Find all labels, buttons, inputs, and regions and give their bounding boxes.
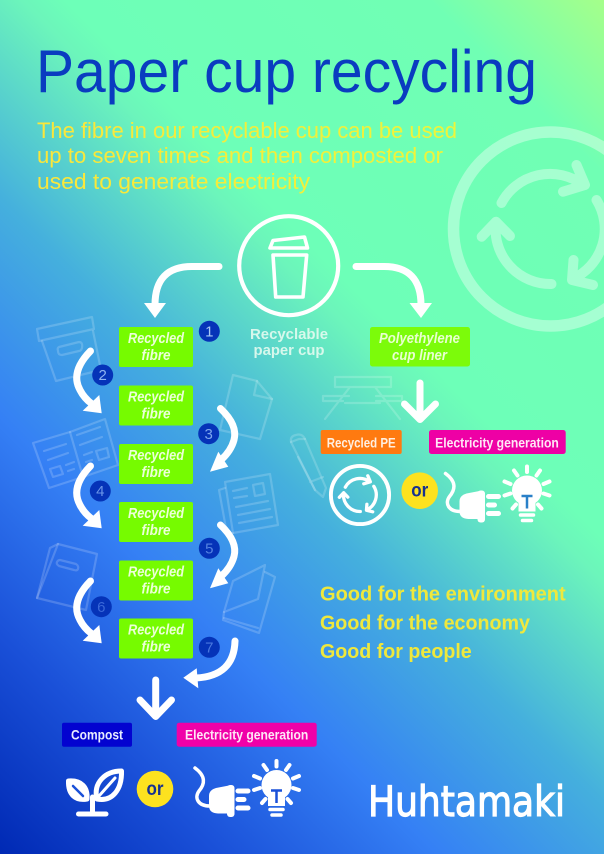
title: Paper cup recycling [36, 38, 537, 105]
badge: or bottom [137, 771, 173, 807]
label: electricity generation right: Electricity generation [435, 434, 559, 450]
badge 1: 1 [205, 324, 213, 340]
subtitle text block [37, 118, 457, 194]
box: recycled fibre 4: Recycled [128, 505, 185, 522]
box: polyethylene cup liner: Polyethylene [379, 330, 460, 347]
box: recycled fibre 1 [119, 327, 193, 367]
icon: plug and bulb bottom [195, 761, 299, 817]
box: recycled fibre 1: Recycled [128, 330, 185, 347]
icon: archive box [37, 317, 101, 381]
badge 2: 2 [99, 367, 107, 384]
label: electricity generation bottom: Electricity generation [185, 726, 308, 742]
box: recycled fibre 4 [119, 502, 193, 542]
icon: closed folder [37, 544, 97, 610]
label: recycled PE: Recycled PE [327, 434, 396, 450]
box: recycled fibre 2: Recycled [128, 388, 185, 406]
box: polyethylene cup liner [370, 327, 470, 366]
icon: seedling [68, 771, 122, 814]
subtitle text block: up to seven times and then composted or [37, 143, 443, 168]
arrow: cup to polyethylene liner [356, 266, 432, 318]
box: recycled fibre 6: fibre [142, 638, 170, 656]
arrow: step 4 [77, 466, 102, 528]
box: recycled fibre 5: Recycled [128, 564, 185, 580]
box: recycled fibre 3: fibre [142, 464, 170, 481]
badge 4 [90, 480, 111, 502]
benefits text block [320, 583, 566, 663]
box: recycled fibre 2: fibre [142, 406, 170, 422]
badge 1 [199, 321, 220, 342]
numbered step badges [90, 321, 220, 658]
label: compost [62, 723, 132, 747]
icon: picnic table [323, 377, 402, 419]
label: recycled PE [321, 430, 402, 454]
icon: pen [291, 434, 326, 497]
badge: or bottom: or [146, 779, 164, 800]
box: recycled fibre 4: fibre [142, 522, 170, 539]
icon: document [220, 375, 272, 439]
badge 3: 3 [205, 426, 213, 443]
box: recycled fibre 3: Recycled [128, 447, 185, 464]
subtitle text block: used to generate electricity [37, 169, 310, 194]
badge 5: 5 [205, 540, 213, 558]
icon: newspaper [219, 474, 278, 534]
box: recycled fibre 2 [119, 386, 193, 426]
arrow: cup to recycled fibre [144, 266, 219, 318]
box: polyethylene cup liner: cup liner [392, 347, 448, 364]
badge 6: 6 [97, 599, 105, 616]
subtitle text block: The fibre in our recyclable cup can be used [37, 118, 457, 143]
icon: open book standing [223, 565, 275, 633]
badge 2 [92, 364, 113, 386]
arrow: step 6 [77, 581, 102, 643]
label: electricity generation right [429, 430, 566, 454]
badge 5 [199, 538, 220, 559]
cycle arrows between fibre boxes [77, 351, 235, 688]
label: recyclable paper cup [250, 326, 328, 359]
box: recycled fibre 6: Recycled [128, 622, 185, 638]
badge 7 [199, 637, 220, 658]
benefits text block: Good for the economy [320, 611, 531, 634]
arrow: down to compost [140, 680, 172, 716]
arrow: step 5 [210, 525, 235, 588]
label: compost: Compost [71, 726, 123, 742]
icon: small recycle symbol [331, 466, 389, 524]
arrow: step 3 [210, 408, 235, 472]
arrow: down from polyethylene [404, 383, 436, 420]
icon: paper cup in circle [239, 216, 338, 315]
badge 4: 4 [96, 483, 104, 500]
badge 7: 7 [205, 640, 213, 656]
label: recyclable paper cup: paper cup [254, 342, 324, 359]
recycled fibre boxes column [119, 327, 193, 658]
label: recyclable paper cup: Recyclable [250, 326, 328, 343]
badge: or right: or [411, 480, 429, 502]
badge 6 [91, 596, 112, 617]
icon: open book [33, 419, 118, 488]
box: recycled fibre 6 [119, 618, 193, 658]
box: recycled fibre 3 [119, 444, 193, 484]
label: electricity generation bottom [177, 723, 317, 747]
badge: or right [401, 472, 438, 509]
badge 3 [198, 423, 219, 444]
box: recycled fibre 5 [119, 560, 193, 600]
logo: Huhtamaki: Huhtamaki [368, 777, 565, 826]
background ghost icons [33, 317, 402, 633]
icon: plug and bulb right [446, 466, 550, 522]
icon: large faded recycle symbol [454, 132, 604, 326]
box: recycled fibre 1: fibre [142, 347, 170, 364]
benefits text block: Good for people [320, 640, 472, 663]
arrow: step 7 [183, 641, 235, 688]
arrow: step 2 [77, 351, 102, 413]
box: recycled fibre 5: fibre [142, 580, 170, 598]
benefits text block: Good for the environment [320, 583, 566, 606]
